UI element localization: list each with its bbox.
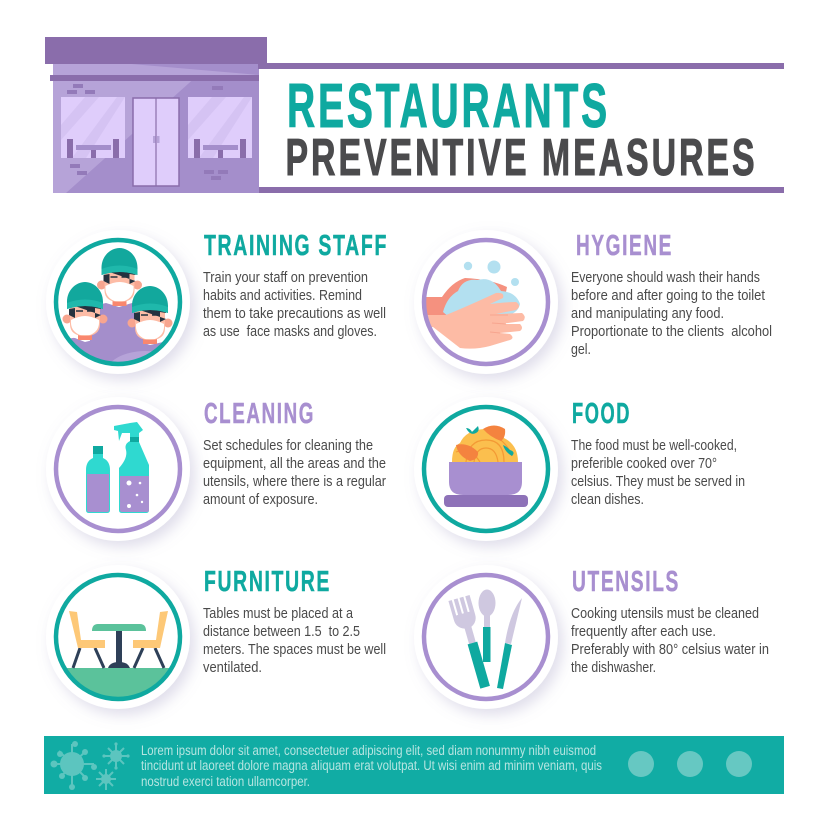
- body text: them to take precautions as well: [203, 306, 386, 322]
- footer banner: [44, 736, 784, 794]
- footer text: [141, 743, 602, 789]
- heading: TRAINING STAFF: [204, 230, 388, 262]
- body text: ventilated.: [203, 660, 262, 676]
- right window: [188, 97, 252, 158]
- body text: utensils, where there is a regular: [203, 474, 386, 490]
- panel: utensils: [414, 565, 769, 709]
- title frame bars: [258, 63, 784, 193]
- body text: Preferably with 80° celsius water in: [571, 642, 769, 658]
- body text: Cooking utensils must be cleaned: [571, 606, 759, 622]
- decorative dots: [628, 751, 752, 777]
- panel: hygiene: [414, 230, 772, 374]
- awning band: [50, 75, 259, 81]
- icon: cleaning bottles: [46, 397, 190, 541]
- body text: [203, 438, 386, 508]
- body text: [203, 270, 386, 340]
- body text: frequently after each use.: [571, 624, 716, 640]
- title: RESTAURANTS: [287, 72, 610, 141]
- body text: gel.: [571, 342, 591, 358]
- body text: celsius. They must be served in: [571, 474, 745, 490]
- storefront: [45, 37, 267, 193]
- body text: meters. The spaces must be well: [203, 642, 386, 658]
- heading: CLEANING: [204, 398, 315, 430]
- body text: Set schedules for cleaning the: [203, 438, 373, 454]
- heading: FOOD: [572, 398, 631, 430]
- body text: Proportionate to the clients alcohol: [571, 324, 772, 340]
- panel: cleaning: [46, 397, 386, 541]
- body text: the dishwasher.: [571, 660, 656, 676]
- body text: [571, 438, 745, 508]
- footer text: nostrud exerci tation ullamcorper.: [141, 774, 310, 789]
- left window: [61, 97, 125, 158]
- icon: viruses: [50, 741, 130, 790]
- footer text: tincidunt ut laoreet dolore magna aliquam erat volutpat. Ut wisi enim ad minim veniam, quis: [141, 758, 602, 773]
- title: [286, 72, 758, 187]
- icon: table and chairs: [46, 565, 190, 718]
- body text: distance between 1.5 to 2.5: [203, 624, 360, 640]
- body text: preferible cooked over 70°: [571, 456, 717, 472]
- body text: and manipulating any food.: [571, 306, 724, 322]
- body text: Train your staff on prevention: [203, 270, 368, 286]
- body text: amount of exposure.: [203, 492, 318, 508]
- body text: [203, 606, 386, 676]
- heading: FURNITURE: [204, 566, 331, 598]
- body text: Tables must be placed at a: [203, 606, 354, 622]
- icon: washing hands: [414, 230, 558, 374]
- footer text: Lorem ipsum dolor sit amet, consectetuer adipiscing elit, sed diam nonummy nibh euismod: [141, 743, 596, 758]
- panel: training staff: [47, 234, 386, 384]
- icon: staff with masks: [46, 230, 190, 399]
- body text: clean dishes.: [571, 492, 644, 508]
- panel: food: [414, 397, 745, 541]
- body text: habits and activities. Remind: [203, 288, 362, 304]
- body text: equipment, all the areas and the: [203, 456, 386, 472]
- icon: noodle bowl: [414, 397, 558, 541]
- heading: UTENSILS: [572, 566, 680, 598]
- icon: fork spoon knife: [414, 565, 558, 709]
- body text: before and after going to the toilet: [571, 288, 765, 304]
- heading: HYGIENE: [576, 230, 673, 262]
- body text: [571, 606, 769, 676]
- body text: as use face masks and gloves.: [203, 324, 377, 340]
- door: [133, 98, 179, 186]
- body text: [571, 270, 772, 358]
- body text: The food must be well-cooked,: [571, 438, 737, 454]
- panel: furniture: [46, 565, 386, 718]
- roof: [45, 37, 267, 64]
- body text: Everyone should wash their hands: [571, 270, 760, 286]
